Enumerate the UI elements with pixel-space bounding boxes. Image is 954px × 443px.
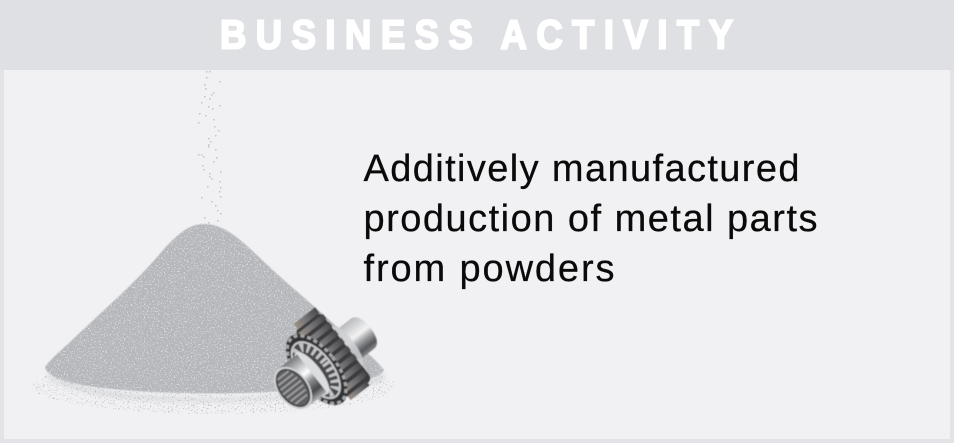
falling powder bbox=[198, 71, 222, 224]
lattice disc bbox=[274, 324, 359, 416]
heading: BUSINESS ACTIVITY bbox=[220, 13, 733, 58]
scattered dust at the base bbox=[48, 372, 384, 402]
pile speckle bbox=[40, 220, 390, 398]
far shaft bbox=[330, 313, 382, 365]
line 1: Additively manufactured bbox=[364, 148, 800, 190]
translucent collar bbox=[325, 322, 368, 371]
line 2: production of metal parts bbox=[364, 198, 818, 240]
icon: metal gear part bbox=[250, 288, 398, 433]
pile body bbox=[45, 224, 384, 393]
illustration: powder pile bbox=[30, 71, 398, 416]
text block: description bbox=[364, 148, 818, 290]
spur gear teeth bbox=[294, 311, 372, 399]
bore bbox=[266, 360, 320, 416]
flange bbox=[289, 347, 335, 399]
header band bbox=[0, 0, 954, 70]
near shaft bbox=[278, 354, 327, 407]
line 3: from powders bbox=[364, 248, 614, 290]
